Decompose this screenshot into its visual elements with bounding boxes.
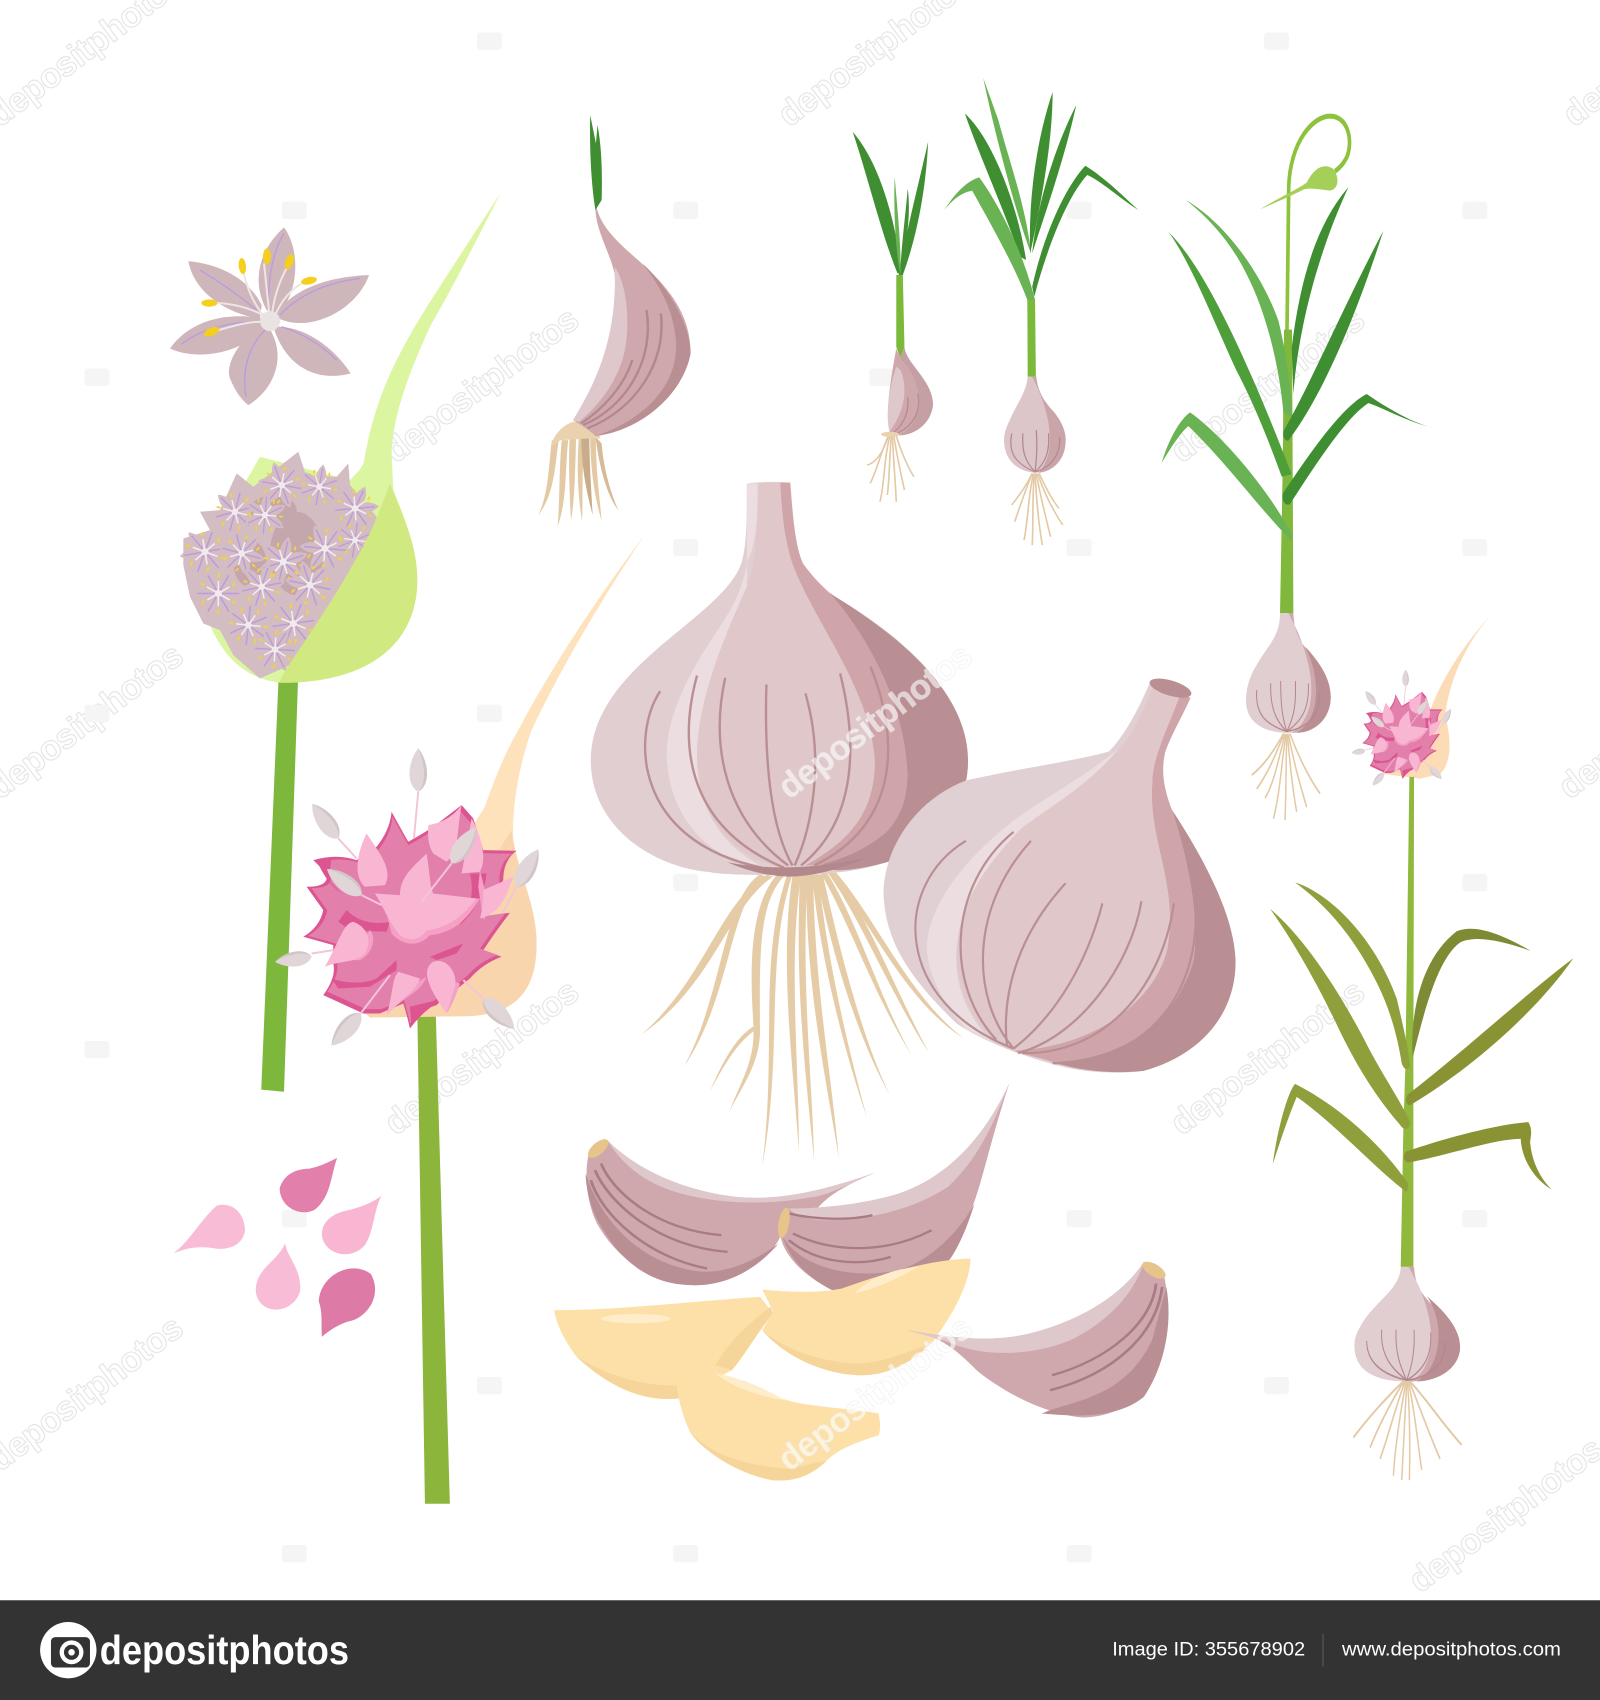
stem [1280, 330, 1293, 613]
bulb base [591, 482, 968, 875]
stem [1027, 300, 1036, 377]
footer bar [0, 1600, 1600, 1700]
dark right side [1053, 810, 1236, 1072]
stem [1401, 777, 1414, 1267]
lilac flower head with green bract [173, 193, 501, 683]
neck opening [1148, 675, 1193, 702]
peeled clove: front [675, 1354, 880, 1481]
leafy garlic plant with curled scape [1162, 116, 1430, 820]
scape bud [1260, 166, 1337, 209]
clove: upswept right [776, 1084, 1009, 1291]
flower cluster [274, 748, 546, 1052]
sprouting clove [538, 115, 691, 527]
clove: lying left [584, 1136, 875, 1285]
highlight band [667, 562, 771, 870]
footer logo [40, 1622, 349, 1678]
garlic cloves and peeled cloves [554, 1084, 1169, 1481]
large upright garlic bulb with roots [591, 482, 968, 1167]
green stem of lilac flower head [261, 678, 298, 1092]
green sprout [590, 115, 602, 210]
small clove [888, 348, 933, 436]
ribs [645, 667, 922, 868]
roots [1012, 473, 1063, 545]
roots [538, 433, 619, 527]
watermarks behind artwork: depositphotos [1164, 301, 1372, 470]
peeled clove: right [762, 1259, 970, 1375]
bulb [1354, 1267, 1460, 1381]
bract: back [197, 193, 501, 683]
watermarks over artwork: depositphotos [771, 1309, 979, 1479]
stem [896, 275, 904, 358]
dark right side [821, 593, 968, 870]
watermarks over artwork: depositphotos [771, 637, 979, 807]
umbel of small flowers [173, 452, 386, 682]
root cap [551, 422, 600, 447]
peeled clove: left [554, 1297, 773, 1399]
clove: far right [907, 1259, 1169, 1418]
bulb [1246, 613, 1331, 733]
leaves [1186, 200, 1292, 417]
center segment [697, 483, 875, 868]
watermarks behind artwork: depositphotos [378, 301, 586, 470]
bulb base [883, 682, 1236, 1073]
clove body [573, 202, 691, 436]
roots [1353, 1381, 1462, 1480]
ribs [915, 832, 1196, 1063]
watermarks behind artwork: depositphotos [378, 973, 586, 1143]
mid shade [780, 483, 907, 865]
loose pink bulbils [173, 1158, 382, 1337]
center segment [957, 685, 1180, 1051]
small bract [1383, 606, 1498, 779]
watermarks behind artwork: depositphotos [1164, 973, 1372, 1143]
flowering garlic plant on right [1270, 606, 1573, 1480]
leaves [853, 132, 928, 275]
single lilac garlic flower [170, 227, 369, 405]
mid shade [1014, 693, 1195, 1062]
small pink flower head [1351, 670, 1454, 788]
curled scape [1287, 116, 1350, 357]
base knot [727, 858, 866, 877]
logo wordmark: depositphotos [100, 1627, 349, 1673]
root cap [881, 432, 899, 437]
large tilted garlic bulb [883, 675, 1236, 1073]
young seedling one [853, 132, 933, 502]
bract: front [280, 483, 417, 683]
roots [867, 433, 914, 502]
green stem of pink flower head [417, 1014, 450, 1504]
leaves [1295, 882, 1410, 1069]
highlight band [927, 749, 1118, 1042]
young seedling two [944, 78, 1138, 545]
website url: www.depositphotos.com [1341, 1639, 1561, 1661]
camera logo mark [40, 1622, 96, 1678]
roots [641, 872, 964, 1167]
watermarks over artwork [771, 637, 979, 1479]
leaves [944, 78, 1138, 300]
bulb [1004, 377, 1066, 473]
pink flower head with peach bract [274, 534, 645, 1052]
bract [347, 534, 645, 1017]
roots [1252, 734, 1320, 820]
image id: Image ID: 355678902 [1112, 1639, 1305, 1661]
